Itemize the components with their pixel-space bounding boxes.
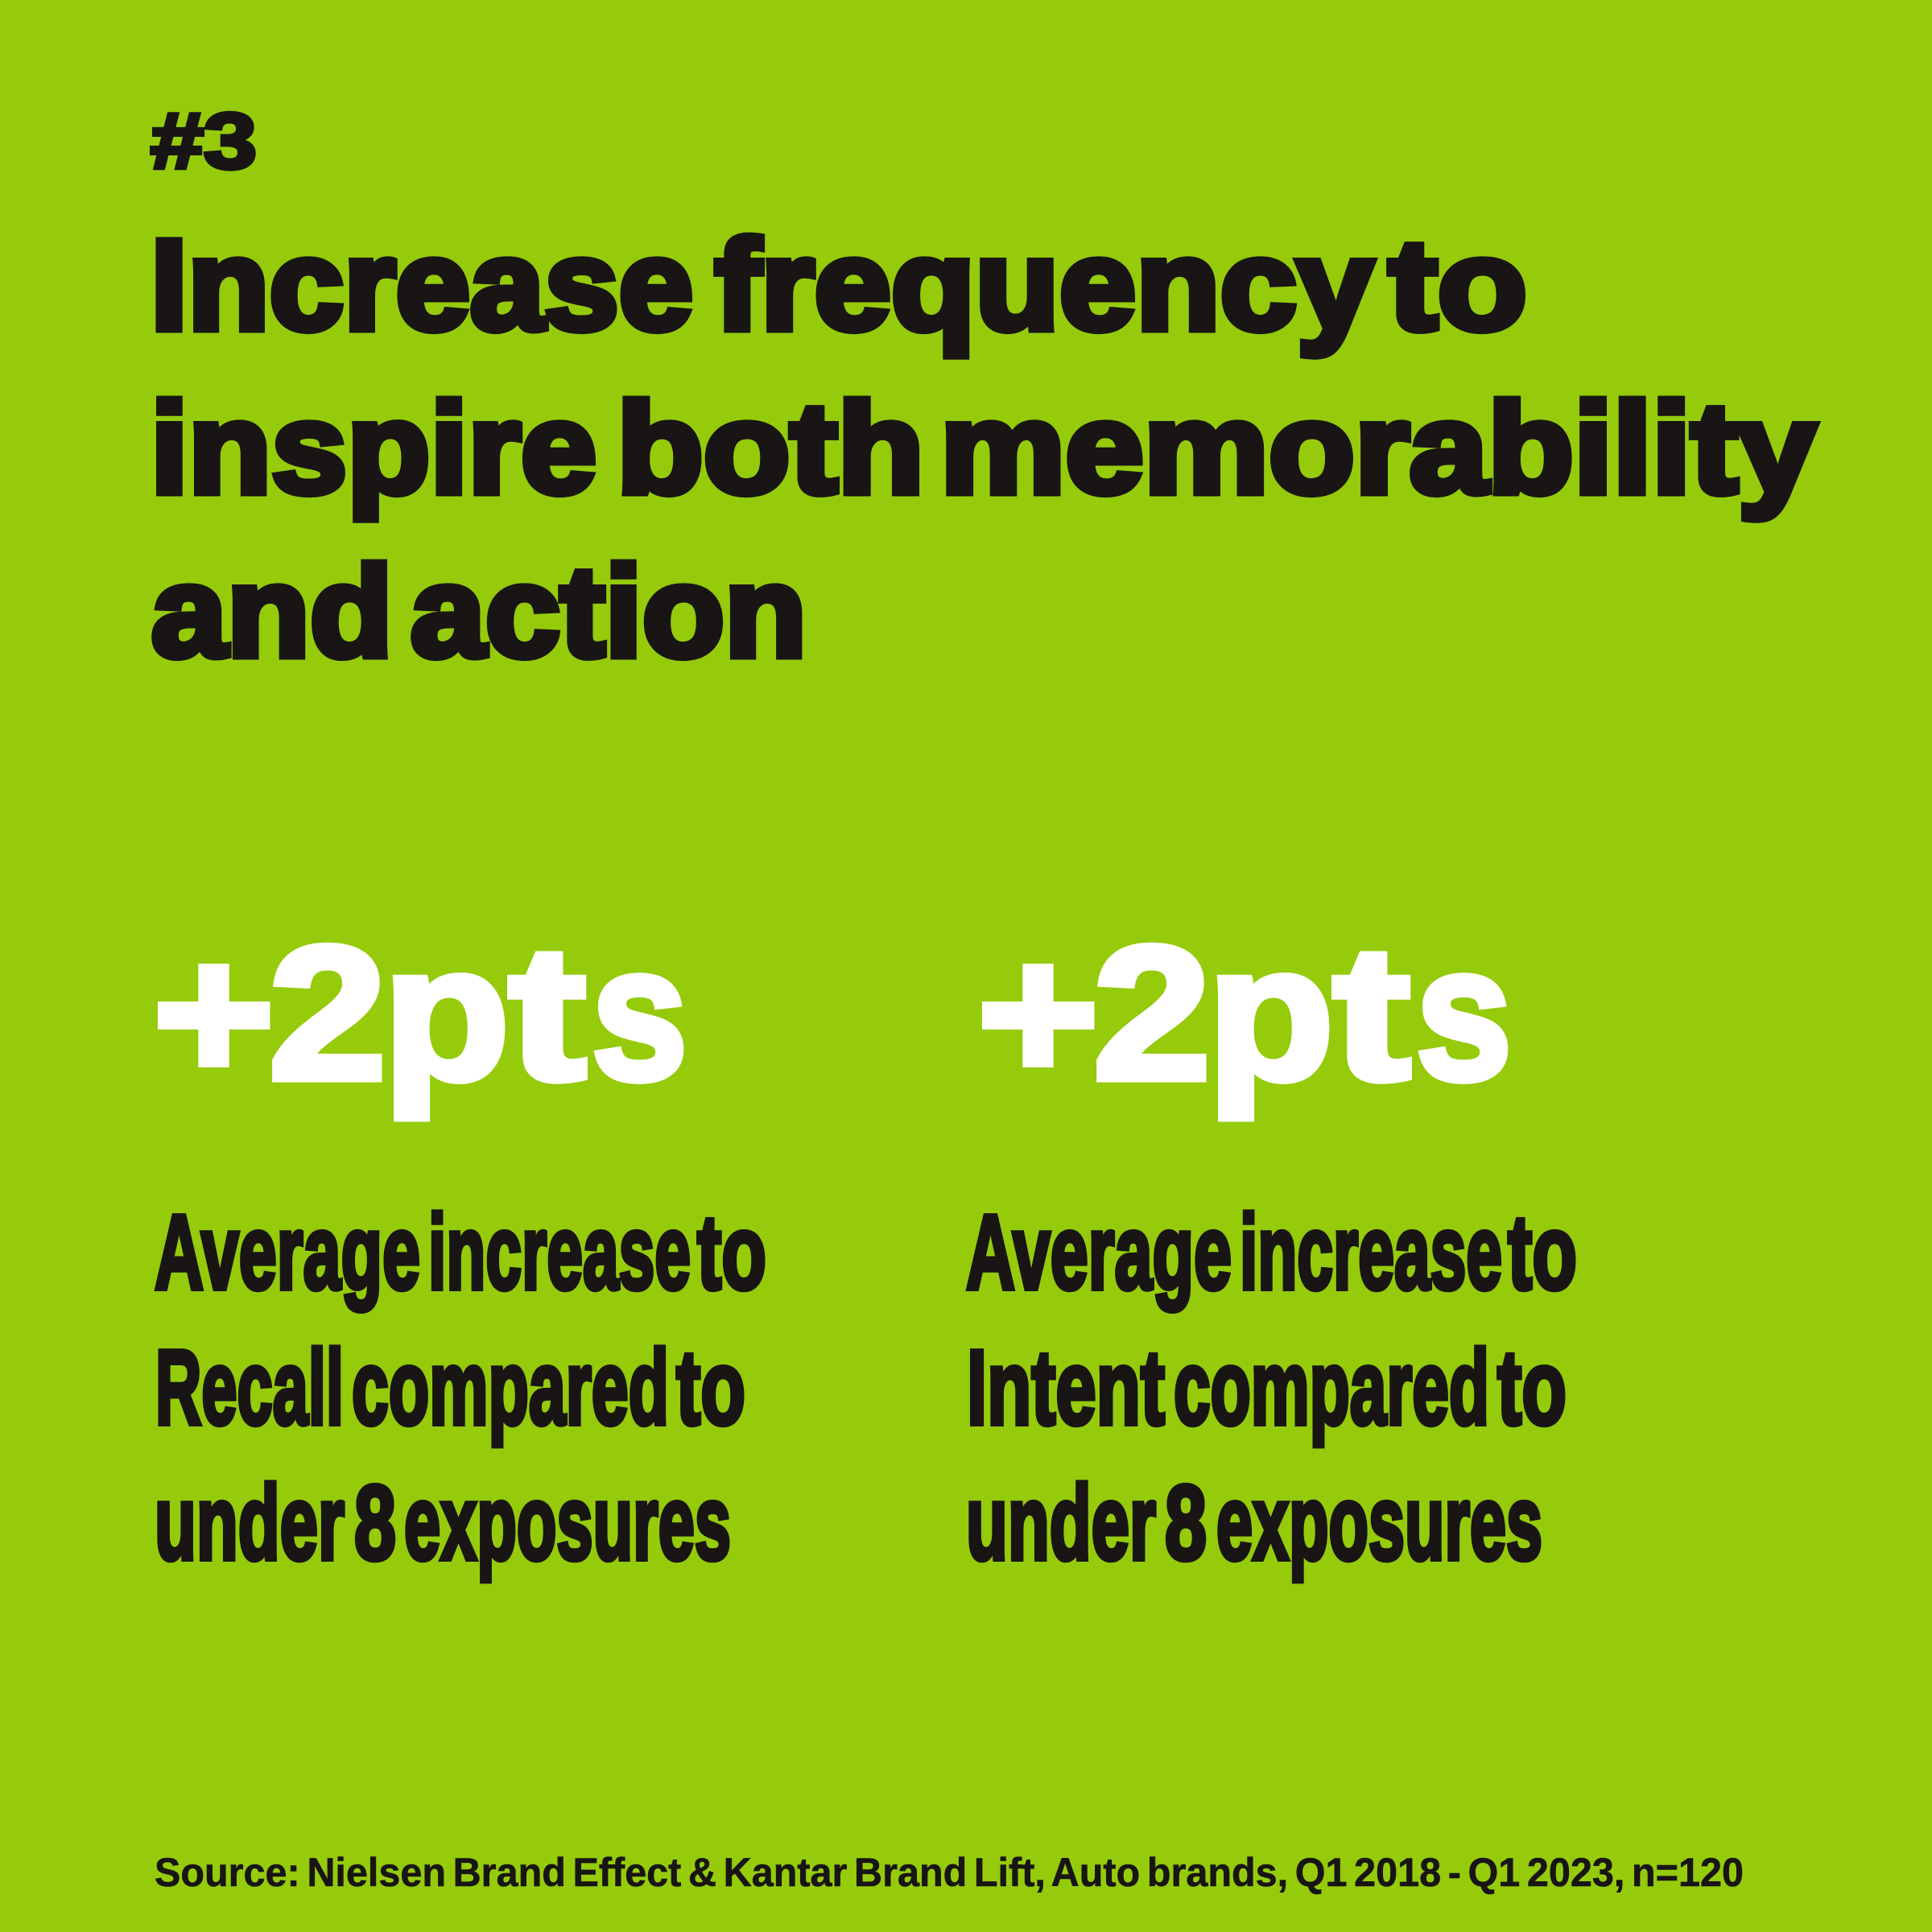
title: to (1389, 213, 1527, 357)
title: frequency (715, 213, 1373, 357)
description: recall: to (676, 1328, 745, 1447)
stat: recall (153, 907, 687, 1120)
stat: intent: t (1333, 907, 1410, 1120)
title: inspire (151, 376, 597, 520)
stat: recall: 2 (269, 907, 386, 1120)
title: action (411, 539, 807, 683)
stat: recall: p (383, 907, 510, 1120)
description: intent: increase (1240, 1193, 1502, 1311)
description: intent: to (1508, 1193, 1577, 1311)
description: intent: Intent (967, 1328, 1165, 1447)
description: intent: exposures (1216, 1463, 1542, 1582)
description: intent: Average (966, 1193, 1232, 1311)
title: memorability (940, 376, 1816, 520)
description: recall: increase (428, 1193, 691, 1311)
stat: recall: + (153, 907, 275, 1120)
title (151, 213, 1816, 683)
description: recall: Recall (155, 1328, 344, 1447)
stat: recall: s (592, 907, 687, 1120)
title: and (151, 539, 393, 683)
description: recall: to (697, 1193, 766, 1311)
description: recall: exposures (404, 1463, 731, 1582)
number label: #3 (151, 97, 257, 185)
title: both (617, 376, 924, 520)
stat: intent: p (1208, 907, 1334, 1120)
description: intent (966, 1193, 1577, 1582)
title: Increase (151, 213, 693, 357)
description: recall: Average (155, 1193, 420, 1311)
description: intent: 8 (1165, 1463, 1207, 1582)
description: recall: 8 (354, 1463, 396, 1582)
description: recall: compared (352, 1328, 669, 1447)
stat: intent: 2 (1093, 907, 1211, 1120)
description: recall: under (155, 1463, 345, 1582)
stat: intent: s (1416, 907, 1512, 1120)
description: intent: to (1497, 1328, 1567, 1447)
stat: recall: t (509, 907, 586, 1120)
description: intent: under (966, 1463, 1156, 1582)
description: recall (155, 1193, 766, 1582)
stat: intent (977, 907, 1512, 1120)
stat: intent: + (977, 907, 1099, 1120)
description: intent: compared (1174, 1328, 1489, 1447)
source note: Source: Nielsen Brand Effect & Kantar Brand Lift, Auto brands, Q1 2018 - Q1 2023, n=120 (155, 1850, 1744, 1895)
